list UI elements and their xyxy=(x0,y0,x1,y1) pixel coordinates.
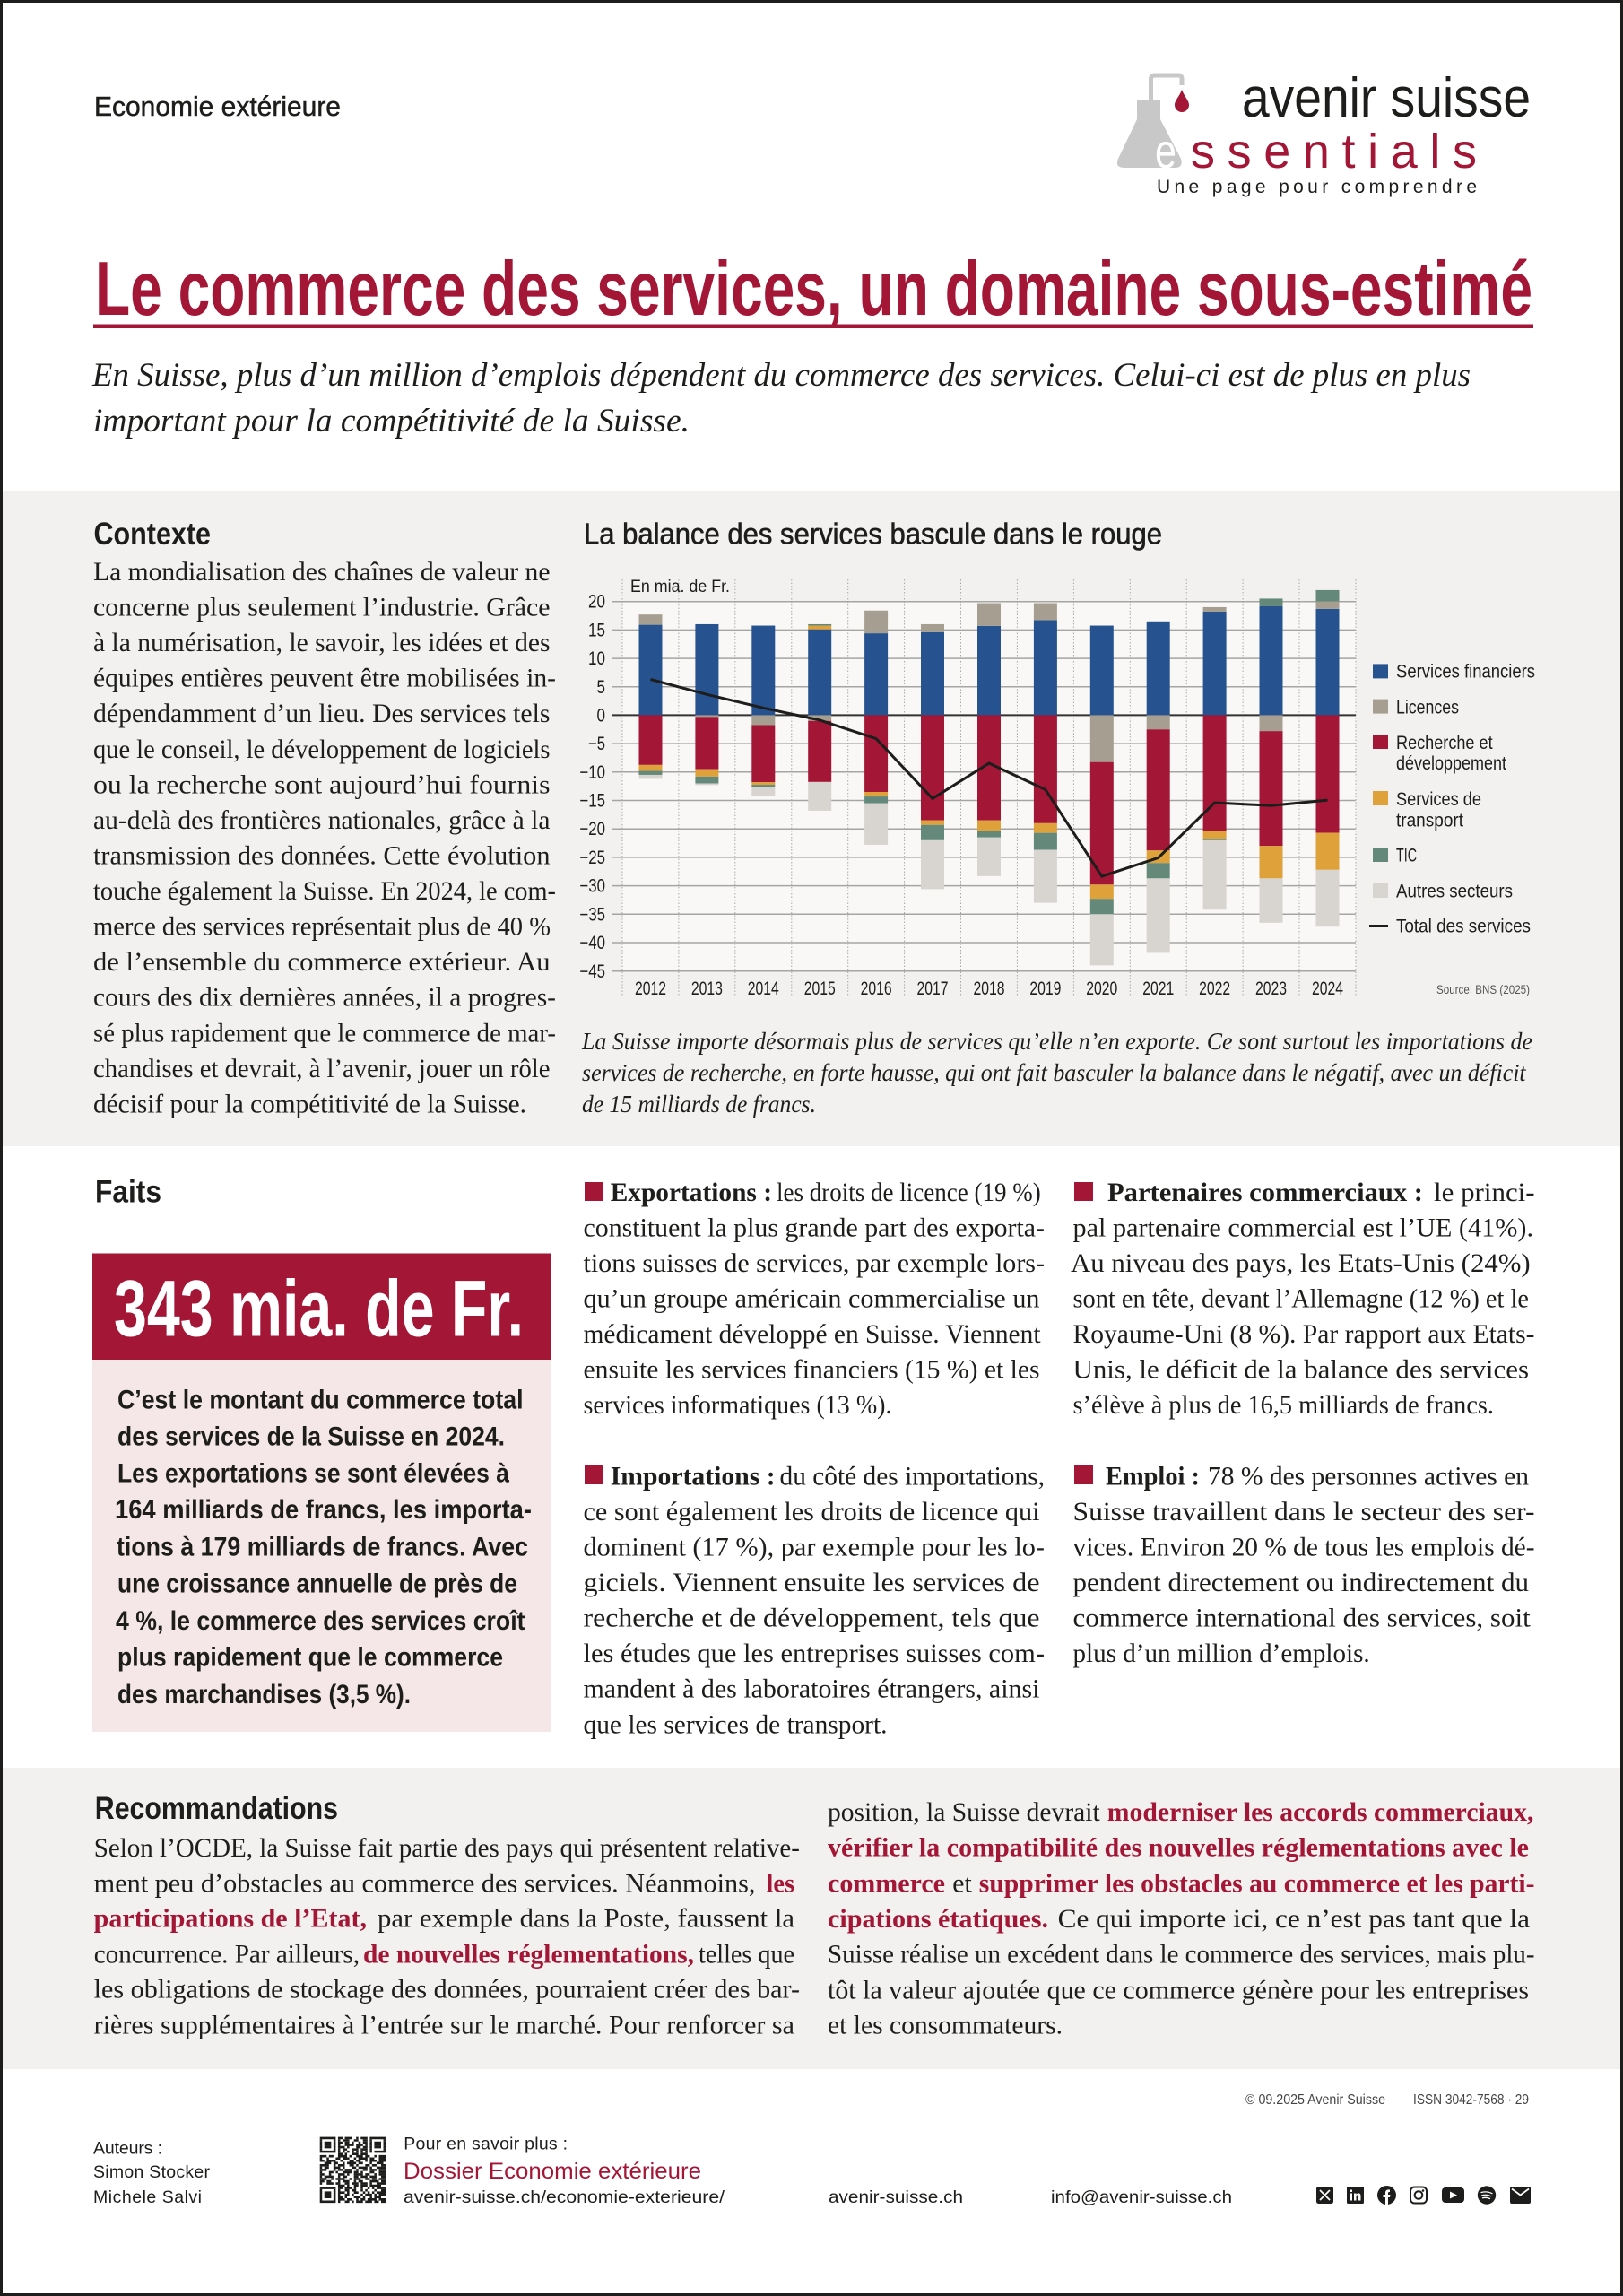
y axis labels: −35 xyxy=(579,904,605,925)
heading: recommandations: Recommandations xyxy=(95,1791,338,1826)
text block: contexte: au-delà des frontières nationales, grâce à la xyxy=(93,805,551,835)
x axis labels: 2014 xyxy=(748,978,779,999)
text block: right column: vérifier la compatibilité des nouvelles réglementations avec le xyxy=(828,1832,1529,1862)
text block: contexte: concerne plus seulement l’industrie. Grâce xyxy=(93,593,551,622)
bar 2024 xyxy=(1316,590,1340,926)
text block: contexte: à la numérisation, le savoir, les idées et des xyxy=(93,628,551,657)
text block: left column: ment peu d’obstacles au commerce des services. Néanmoins, xyxy=(94,1868,755,1898)
x axis labels: 2016 xyxy=(861,978,892,999)
legend: Total des services xyxy=(1396,917,1531,937)
heading: contexte: Contexte xyxy=(93,517,211,552)
authors: Auteurs : xyxy=(93,2139,162,2159)
callout text: C’est le montant du commerce total xyxy=(117,1385,524,1415)
logo essentials: e xyxy=(1155,125,1176,178)
x axis labels: 2020 xyxy=(1086,978,1117,999)
x axis labels: 2013 xyxy=(691,978,723,999)
text block: emploi xyxy=(1072,1461,1535,1668)
icon: mail xyxy=(1510,2187,1531,2204)
y axis labels: −10 xyxy=(579,762,605,783)
authors: Simon Stocker xyxy=(93,2162,210,2182)
callout text: des services de la Suisse en 2024. xyxy=(117,1422,505,1452)
stacked bar chart xyxy=(579,577,1535,999)
icon: X xyxy=(1316,2187,1333,2204)
icon: LinkedIn xyxy=(1347,2187,1364,2204)
text block: contexte: touche également la Suisse. En 2024, le com- xyxy=(93,876,556,906)
y axis labels: −5 xyxy=(588,734,605,754)
text block: contexte xyxy=(93,557,556,1118)
text block: contexte: de l’ensemble du commerce extérieur. Au xyxy=(93,947,551,977)
legend: Licences xyxy=(1396,698,1459,718)
text block: exportations: constituent la plus grande part des exporta- xyxy=(583,1213,1045,1243)
text block: importations: du côté des importations, xyxy=(780,1461,1045,1491)
x axis labels: 2015 xyxy=(804,978,836,999)
text block: partenaires commerciaux: Au niveau des pays, les Etats-Unis (24%) xyxy=(1071,1248,1531,1278)
footer xyxy=(93,2092,1531,2207)
legend: Services financiers xyxy=(1396,662,1535,683)
panel: recommandations xyxy=(3,1768,1620,2069)
logo: avenir suisse essentials xyxy=(1117,67,1531,197)
x axis labels: 2023 xyxy=(1255,978,1287,999)
text block: partenaires commerciaux: Partenaires commerciaux : xyxy=(1107,1178,1423,1207)
text block: contexte: transmission des données. Cette évolution xyxy=(93,841,551,870)
axis unit label: En mia. de Fr. xyxy=(630,577,730,596)
legend: Services de xyxy=(1396,789,1481,810)
text block: contexte: dépendamment d’un lieu. Des services tels xyxy=(93,699,551,728)
text block: exportations: médicament développé en Suisse. Viennent xyxy=(583,1319,1041,1349)
text block: partenaires commerciaux: pal partenaire commercial est l’UE (41%). xyxy=(1072,1213,1533,1243)
callout text: plus rapidement que le commerce xyxy=(117,1643,503,1673)
text block: emploi: Suisse travaillent dans le secteur des ser- xyxy=(1072,1497,1535,1526)
x axis labels: 2019 xyxy=(1029,978,1061,999)
title rule xyxy=(93,325,1533,328)
bars xyxy=(638,590,1340,965)
icon: Spotify xyxy=(1478,2186,1496,2205)
text block: importations: recherche et de développement, tels que xyxy=(583,1604,1040,1632)
callout text: Les exportations se sont élevées à xyxy=(117,1459,509,1489)
text block: importations xyxy=(583,1461,1045,1739)
text block: left column: telles que xyxy=(699,1939,794,1969)
text block: importations: ce sont également les droits de licence qui xyxy=(583,1497,1040,1526)
subtitle: En Suisse, plus d’un million d’emplois dépendent du commerce des services. Celui-ci est de plus en plus xyxy=(91,357,1471,394)
text block: left column: les xyxy=(766,1868,794,1898)
panel: contexte and chart xyxy=(3,491,1620,1146)
text block: right column: position, la Suisse devrait xyxy=(828,1797,1100,1827)
x axis labels xyxy=(635,978,1343,999)
text block: exportations: qu’un groupe américain commercialise un xyxy=(583,1284,1040,1313)
bar 2015 xyxy=(808,624,831,811)
text block: contexte: chandises et devrait, à l’avenir, jouer un rôle xyxy=(93,1054,551,1083)
text block: exportations: ensuite les services financiers (15 %) et les xyxy=(583,1354,1040,1385)
panel: faits xyxy=(92,1175,1535,1739)
text block: right column: Ce qui importe ici, ce n’est pas tant que la xyxy=(1058,1904,1530,1934)
grid lines xyxy=(612,579,1356,996)
text block: exportations: services informatiques (13 %). xyxy=(583,1390,891,1420)
text block: exportations: les droits de licence (19 %) xyxy=(777,1178,1041,1207)
icon: red drop xyxy=(1175,90,1189,112)
text block: left column: concurrence. Par ailleurs, xyxy=(94,1939,360,1969)
callout text: 164 milliards de francs, les importa- xyxy=(115,1495,532,1525)
QR code xyxy=(320,2138,386,2202)
text block: emploi: pendent directement ou indirectement du xyxy=(1072,1568,1529,1597)
text block: contexte: cours des dix dernières années, il a progres- xyxy=(93,983,556,1013)
text block: importations: que les services de transport. xyxy=(583,1709,888,1739)
callout: 343 mia. de Fr. xyxy=(92,1254,551,1732)
text block: exportations: Exportations : xyxy=(611,1178,772,1207)
text block: partenaires commerciaux xyxy=(1071,1178,1535,1420)
text block: emploi: 78 % des personnes actives en xyxy=(1208,1461,1529,1491)
text block: partenaires commerciaux: sont en tête, devant l’Allemagne (12 %) et le xyxy=(1072,1284,1529,1313)
text block: partenaires commerciaux: s’élève à plus de 16,5 milliards de francs. xyxy=(1072,1390,1494,1420)
callout text: une croissance annuelle de près de xyxy=(117,1570,517,1599)
callout text: 4 %, le commerce des services croît xyxy=(116,1606,525,1636)
text block: importations: les études que les entreprises suisses com- xyxy=(583,1639,1045,1668)
text block: right column: cipations étatiques. xyxy=(828,1904,1048,1934)
logo tagline: Une page pour comprendre xyxy=(1157,177,1477,197)
text block: left column xyxy=(94,1833,800,2039)
y axis labels: 10 xyxy=(588,648,605,669)
text block: importations: mandent à des laboratoires étrangers, ainsi xyxy=(583,1674,1040,1704)
icon: red square xyxy=(1074,1465,1093,1484)
text block: emploi: vices. Environ 20 % de tous les emplois dé- xyxy=(1072,1532,1535,1562)
text block: contexte: merce des services représentait plus de 40 % xyxy=(93,912,551,942)
subtitle xyxy=(91,357,1471,439)
text block: exportations: tions suisses de services, par exemple lors- xyxy=(583,1248,1045,1278)
text block: contexte: La mondialisation des chaînes de valeur ne xyxy=(93,557,551,587)
subtitle: important pour la compétitivité de la Suisse. xyxy=(93,403,690,439)
text block: left column: les obligations de stockage des données, pourraient créer des bar- xyxy=(94,1975,800,2005)
copyright: ISSN 3042-7568 · 29 xyxy=(1413,2092,1529,2108)
plot area xyxy=(622,602,1356,971)
y axis labels: −15 xyxy=(579,791,605,811)
text block: right column: et xyxy=(952,1868,972,1898)
email: info@avenir-suisse.ch xyxy=(1051,2187,1232,2207)
text block: emploi: Emploi : xyxy=(1106,1461,1200,1491)
callout text: tions à 179 milliards de francs. Avec xyxy=(117,1532,528,1561)
heading: chart: La balance des services bascule dans le rouge xyxy=(584,517,1162,551)
text block: right column: commerce xyxy=(828,1868,945,1898)
icon: flask xyxy=(1117,75,1182,168)
text block: right column: supprimer les obstacles au commerce et les parti- xyxy=(979,1868,1535,1898)
copyright: © 09.2025 Avenir Suisse xyxy=(1245,2092,1385,2108)
icon: red square xyxy=(1074,1182,1093,1201)
authors xyxy=(93,2139,210,2207)
text block: partenaires commerciaux: Unis, le déficit de la balance des services xyxy=(1072,1354,1529,1385)
legend: transport xyxy=(1396,810,1463,831)
legend: Autres secteurs xyxy=(1396,882,1513,902)
total line xyxy=(651,680,1327,876)
text block: partenaires commerciaux: le princi- xyxy=(1434,1178,1535,1207)
y axis labels: −40 xyxy=(579,933,605,953)
more info link: avenir-suisse.ch/economie-exterieure/ xyxy=(404,2187,725,2207)
y axis labels: 20 xyxy=(588,592,605,613)
x axis labels: 2022 xyxy=(1199,978,1230,999)
authors: Michele Salvi xyxy=(93,2187,202,2207)
more info link: Dossier Economie extérieure xyxy=(404,2159,701,2184)
text block: contexte: que le conseil, le développement de logiciels xyxy=(93,735,551,764)
text block: emploi: commerce international des services, soit xyxy=(1072,1604,1531,1632)
heading: faits: Faits xyxy=(95,1175,161,1210)
text block: left column: de nouvelles réglementations, xyxy=(363,1939,694,1969)
logo essentials: ssentials xyxy=(1191,125,1477,178)
text block: left column: par exemple dans la Poste, faussent la xyxy=(378,1904,794,1934)
text block: left column: participations de l’Etat, xyxy=(94,1904,367,1934)
text block: right column: moderniser les accords commerciaux, xyxy=(1107,1797,1533,1827)
callout number: 343 mia. de Fr. xyxy=(114,1263,524,1352)
bar 2019 xyxy=(1034,604,1057,903)
legend: TIC xyxy=(1396,846,1417,866)
text block: contexte: ou la recherche sont aujourd’hui fournis xyxy=(93,770,551,799)
x axis labels: 2024 xyxy=(1312,978,1343,999)
y axis labels: 5 xyxy=(597,677,605,698)
more info link: Pour en savoir plus : xyxy=(404,2135,568,2154)
bar 2017 xyxy=(921,624,944,889)
x axis labels: 2012 xyxy=(635,978,666,999)
text block: contexte: décisif pour la compétitivité de la Suisse. xyxy=(93,1089,526,1118)
bar 2023 xyxy=(1259,598,1282,923)
text block: right column: Suisse réalise un excédent dans le commerce des services, mais plu- xyxy=(828,1939,1535,1969)
callout text xyxy=(115,1385,532,1709)
chart caption: de 15 milliards de francs. xyxy=(582,1090,816,1118)
bar 2018 xyxy=(977,604,1001,876)
text block: importations: dominent (17 %), par exemple pour les lo- xyxy=(583,1532,1045,1562)
icon: Instagram xyxy=(1410,2187,1427,2203)
chart caption: La Suisse importe désormais plus de services qu’elle n’en exporte. Ce sont surtout les importations de xyxy=(581,1027,1532,1055)
chart caption xyxy=(581,1027,1532,1118)
chart caption: services de recherche, en forte hausse, qui ont fait basculer la balance dans le négatif, avec un déficit xyxy=(582,1058,1527,1086)
bar 2020 xyxy=(1090,626,1114,965)
y axis labels: −20 xyxy=(579,819,605,839)
text block: right column: tôt la valeur ajoutée que ce commerce génère pour les entreprises xyxy=(828,1975,1529,2005)
bar 2016 xyxy=(864,611,888,845)
legend: Recherche et xyxy=(1396,733,1493,753)
bar 2021 xyxy=(1147,622,1170,952)
more info link xyxy=(404,2135,725,2207)
text block: contexte: sé plus rapidement que le commerce de mar- xyxy=(93,1018,556,1048)
text block: right column xyxy=(828,1797,1535,2039)
text block: right column: et les consommateurs. xyxy=(828,2010,1063,2039)
icon: YouTube xyxy=(1442,2187,1464,2203)
y axis labels: 0 xyxy=(597,705,605,726)
bar 2012 xyxy=(638,614,662,778)
y axis labels xyxy=(579,592,605,982)
logo wordmark: avenir suisse xyxy=(1242,67,1531,129)
text block: left column: Selon l’OCDE, la Suisse fait partie des pays qui présentent relative- xyxy=(94,1833,800,1863)
source note: Source: BNS (2025) xyxy=(1436,982,1530,996)
text block: partenaires commerciaux: Royaume-Uni (8 %). Par rapport aux Etats- xyxy=(1072,1319,1535,1349)
social icons xyxy=(1316,2186,1531,2205)
text block: contexte: équipes entières peuvent être mobilisées in- xyxy=(93,664,556,693)
copyright xyxy=(1245,2092,1529,2108)
text block: exportations xyxy=(583,1178,1045,1420)
legend: développement xyxy=(1396,753,1506,774)
text block: importations: Importations : xyxy=(611,1461,776,1491)
bar 2013 xyxy=(695,624,718,785)
text block: importations: giciels. Viennent ensuite les services de xyxy=(583,1568,1040,1597)
bar 2022 xyxy=(1203,607,1227,909)
y axis labels: −45 xyxy=(579,961,605,982)
text block: emploi: plus d’un million d’emplois. xyxy=(1072,1639,1370,1668)
icon: red square xyxy=(585,1465,603,1484)
callout text: des marchandises (3,5 %). xyxy=(117,1680,411,1709)
icon: red square xyxy=(585,1182,603,1201)
x axis labels: 2018 xyxy=(974,978,1004,999)
y axis labels: 15 xyxy=(588,620,605,640)
icon: Facebook xyxy=(1377,2186,1396,2205)
y axis labels: −30 xyxy=(579,876,605,897)
text block: left column: rières supplémentaires à l’entrée sur le marché. Pour renforcer sa xyxy=(94,2010,794,2039)
header section label: Economie extérieure xyxy=(94,91,341,122)
x axis labels: 2021 xyxy=(1142,978,1174,999)
legend xyxy=(1369,662,1535,937)
website: avenir-suisse.ch xyxy=(829,2187,963,2207)
y axis labels: −25 xyxy=(579,848,605,868)
x axis labels: 2017 xyxy=(916,978,949,999)
bar 2014 xyxy=(751,626,775,796)
